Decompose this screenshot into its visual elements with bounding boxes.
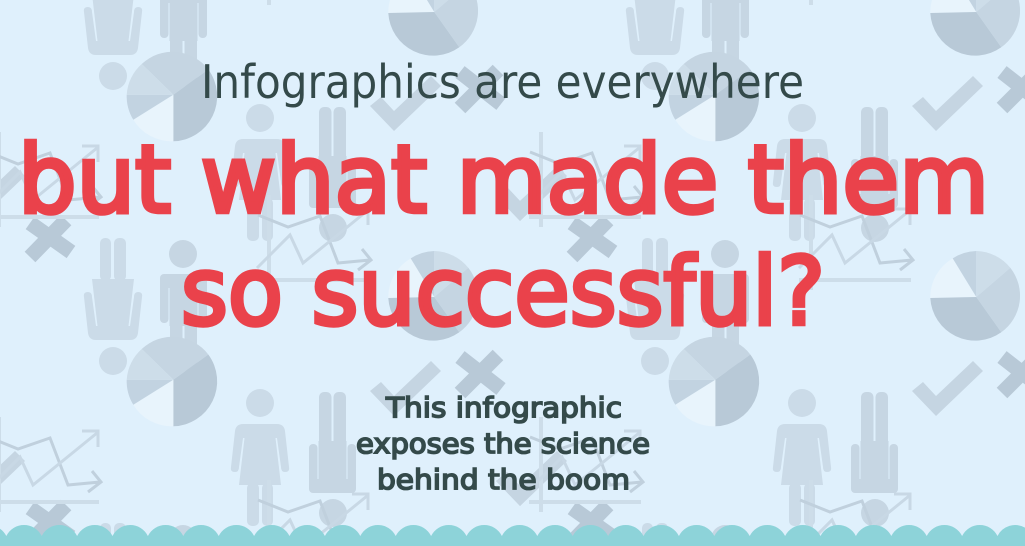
heading line two: so successful?: [181, 238, 825, 347]
supporting line one: This infographic: [385, 392, 622, 424]
supporting line two: exposes the science: [356, 428, 650, 460]
intro line: Infographics are everywhere: [201, 55, 804, 109]
main heading: [18, 126, 989, 347]
scalloped bottom edge: [0, 525, 1025, 546]
supporting text: [356, 392, 650, 496]
supporting line three: behind the boom: [377, 464, 630, 496]
heading line one: but what made them: [18, 126, 989, 235]
